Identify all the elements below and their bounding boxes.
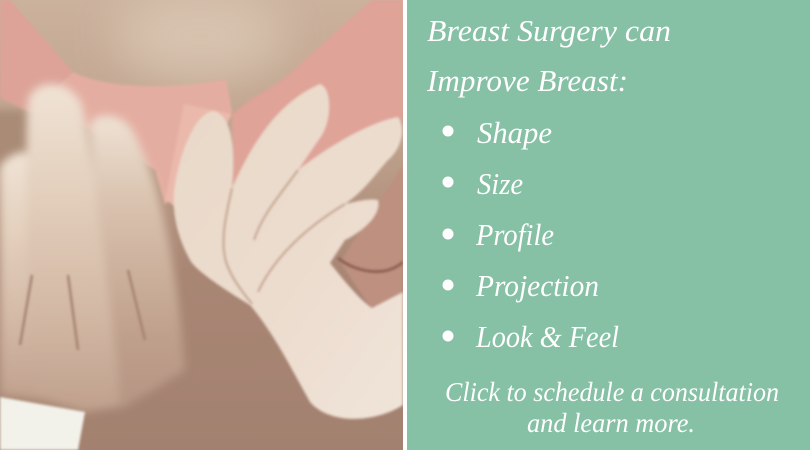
heading: Breast Surgery can: [427, 13, 671, 48]
bullet list: Look & Feel: [475, 319, 619, 354]
call to action: and learn more.: [527, 408, 695, 438]
heading: Improve Breast:: [426, 63, 628, 98]
left hand: [0, 84, 185, 412]
call to action: Click to schedule a consultation: [445, 377, 779, 407]
shadowed inner palm: [340, 165, 403, 310]
white fabric, bottom-left: [0, 397, 85, 450]
right hand: [174, 84, 403, 419]
bra strap, left: [0, 0, 232, 205]
right finger creases: [224, 170, 345, 304]
bullet list: Profile: [475, 217, 554, 252]
heading: [426, 13, 671, 98]
bullet list: Shape: [477, 115, 552, 150]
palm crease: [338, 258, 403, 272]
bullet list: [442, 115, 619, 354]
bullet list: Projection: [475, 268, 599, 303]
bra cup, right: [232, 0, 403, 195]
shadow lines between left fingers: [20, 270, 145, 350]
bullet list: Size: [477, 166, 523, 201]
panel: green text panel: [407, 0, 810, 450]
bra elastic tab: [165, 104, 232, 208]
call to action: [445, 377, 779, 438]
photo: hands fastening a pink bra: [0, 0, 403, 450]
